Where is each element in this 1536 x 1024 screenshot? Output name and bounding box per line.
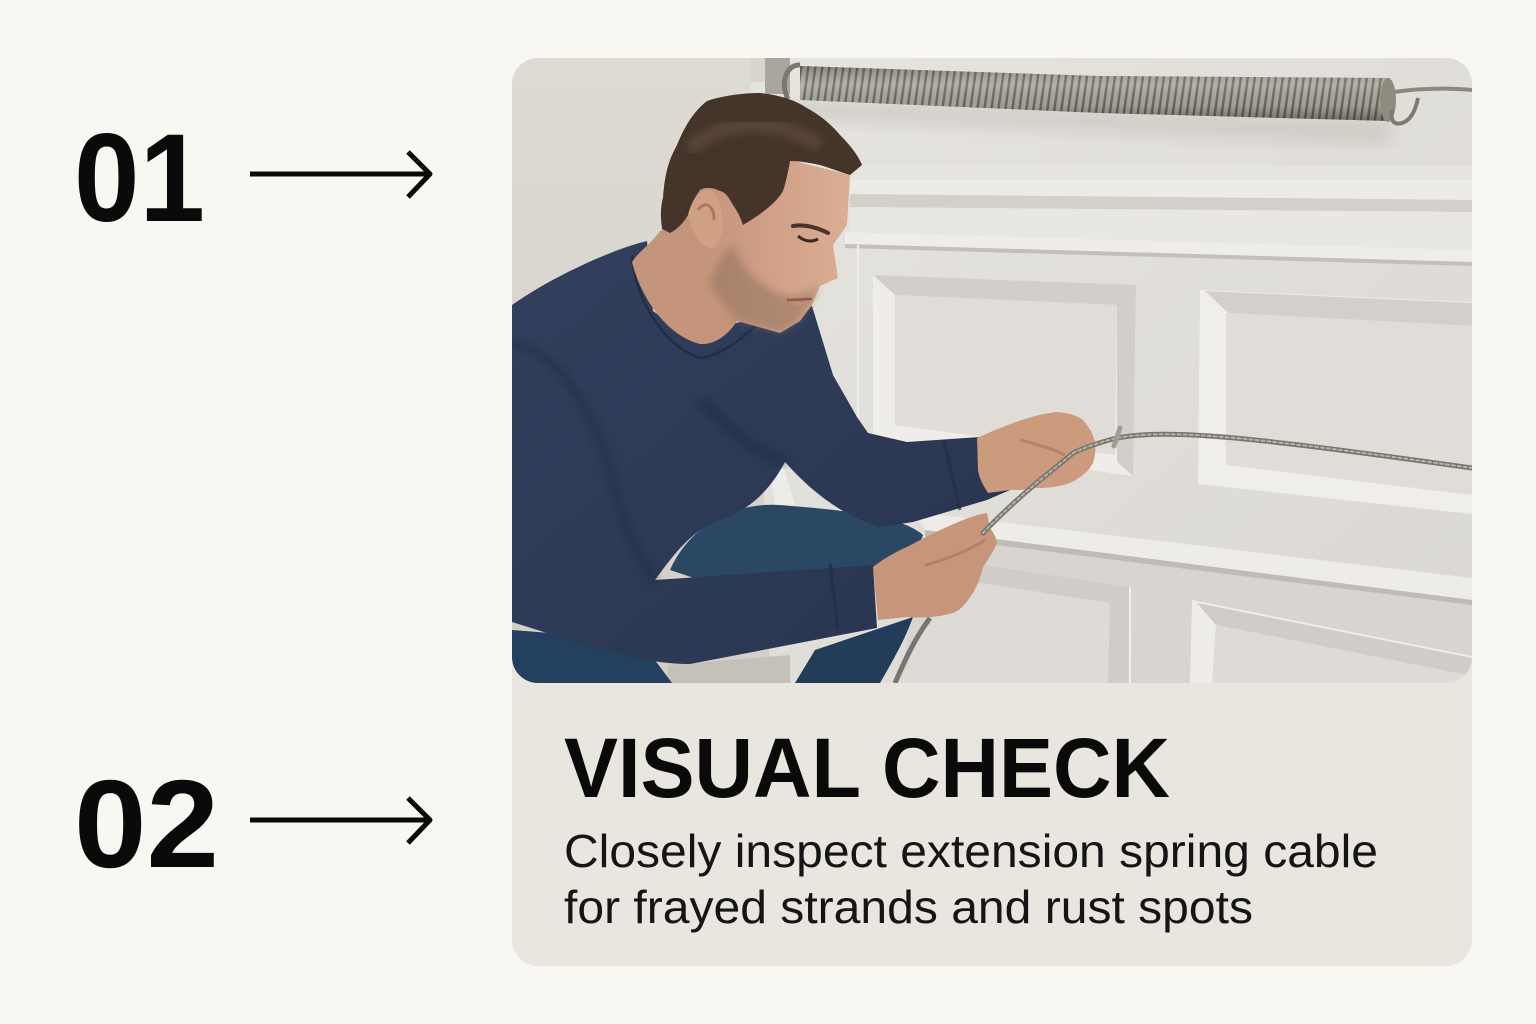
floor [668, 655, 790, 683]
arrow 01 [250, 152, 430, 197]
neck [632, 215, 737, 344]
lower hand [873, 513, 997, 620]
ear [688, 190, 723, 248]
extension spring [784, 65, 1472, 124]
eyebrow [793, 225, 828, 233]
arrow 02 [250, 798, 430, 843]
eye [798, 236, 818, 241]
step number 02 with arrow [74, 755, 430, 894]
inner ear [698, 205, 714, 220]
lip [790, 302, 812, 307]
hair highlight [690, 125, 820, 150]
door panel upper right [1198, 290, 1472, 514]
hair [661, 93, 862, 233]
door stile line [857, 245, 859, 420]
heading: VISUAL CHECK [564, 721, 1170, 815]
number 01: 01 [74, 109, 205, 248]
door edge [772, 466, 795, 505]
body line 2: for frayed strands and rust spots [564, 881, 1253, 933]
head [661, 93, 862, 333]
step number 01 with arrow [74, 109, 430, 248]
spring shadow [800, 100, 1390, 145]
upper hand [977, 412, 1095, 493]
door panel lower right [1190, 600, 1472, 683]
face [688, 160, 850, 333]
door track bracket [750, 58, 790, 94]
door top molding [845, 180, 1472, 266]
wall [512, 58, 769, 678]
stubble [710, 245, 820, 333]
cable lower [895, 618, 930, 683]
number 02: 02 [74, 755, 219, 894]
photo: man inspecting garage door cable [512, 58, 1472, 683]
jeans [512, 505, 923, 683]
panel: visual check card [512, 58, 1472, 966]
door panel lower left [1129, 587, 1131, 683]
door lower rail [915, 512, 1472, 600]
body line 1: Closely inspect extension spring cable [564, 825, 1378, 877]
door panel upper left [873, 275, 1136, 476]
sweater [512, 241, 1010, 664]
body text [564, 825, 1378, 933]
mouth [787, 299, 812, 300]
cable upper [983, 428, 1472, 533]
shadow band under rail [906, 536, 1020, 646]
garage door [750, 58, 1472, 683]
